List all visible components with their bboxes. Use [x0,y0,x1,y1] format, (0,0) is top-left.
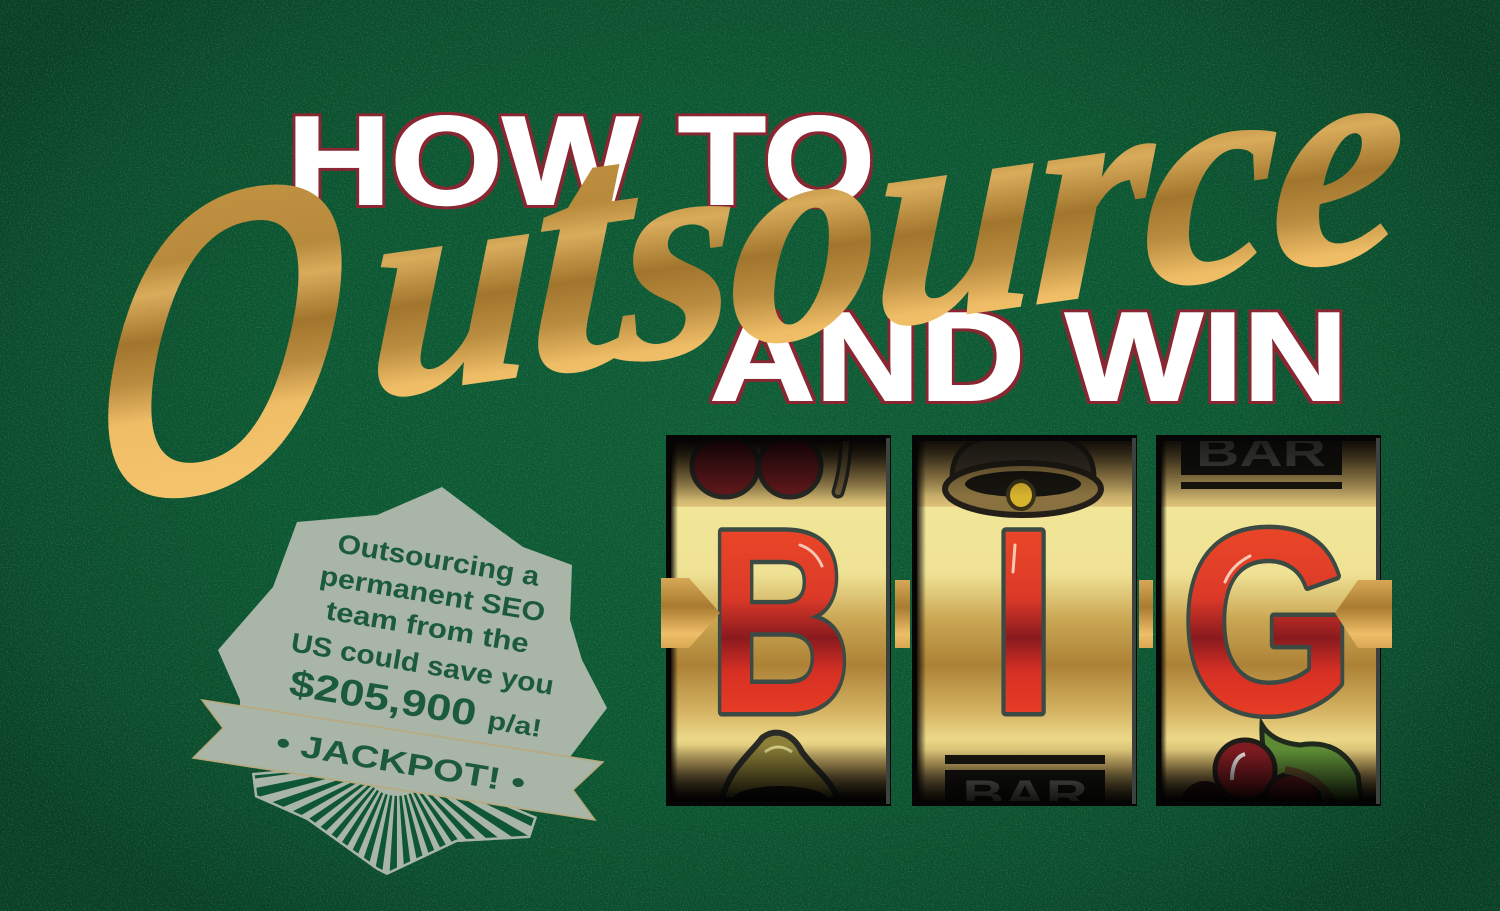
badge text: team from the [324,595,531,659]
badge text: • JACKPOT! • [274,725,528,801]
slot reel 2: letter I [912,435,1137,817]
badge body [218,487,607,757]
icon: cherries and leaf on reel 3 [1184,718,1362,797]
letter I: I [989,476,1058,768]
icon: bell on reel 1 [722,730,838,796]
badge sunburst rays [252,771,537,875]
letter G: G [1181,475,1354,768]
slot reel 3: letter G [1156,431,1381,830]
icon: BAR symbol on reel 2 [945,755,1105,801]
payline pointer: left [661,578,720,648]
payline connector: between reels 2 and 3 [1139,580,1153,648]
letter highlights [800,545,1250,582]
badge text: US could save you [289,627,556,701]
heading: HOW TO: HOW TO [287,90,875,231]
heading: Outsource gold script: u [365,105,537,464]
icon: BAR symbol on reel 3 [1181,441,1342,489]
letter B: B [708,476,852,768]
badge text: Outsourcing a [335,528,543,592]
badge: jackpot callout [193,487,607,880]
heading: AND WIN: AND WIN [710,286,1348,427]
icon: cherries on reel 1 [692,435,846,497]
heading: Outsource gold script: O [79,101,353,643]
badge text: $205,900 p/a! [286,662,546,745]
icon: BAR symbol on reel 2: BAR [962,773,1088,817]
badge text [274,528,556,801]
payline connector: between reels 1 and 2 [895,580,910,648]
heading: Outsource gold script [79,0,1407,643]
badge text: permanent SEO [318,561,547,628]
slot reel 1: letter B [666,435,891,814]
ribbon banner [193,700,603,820]
icon: bell on reel 2 [945,438,1101,515]
payline pointer: right [1335,580,1392,648]
icon: BAR symbol on reel 3: BAR [1196,431,1326,475]
